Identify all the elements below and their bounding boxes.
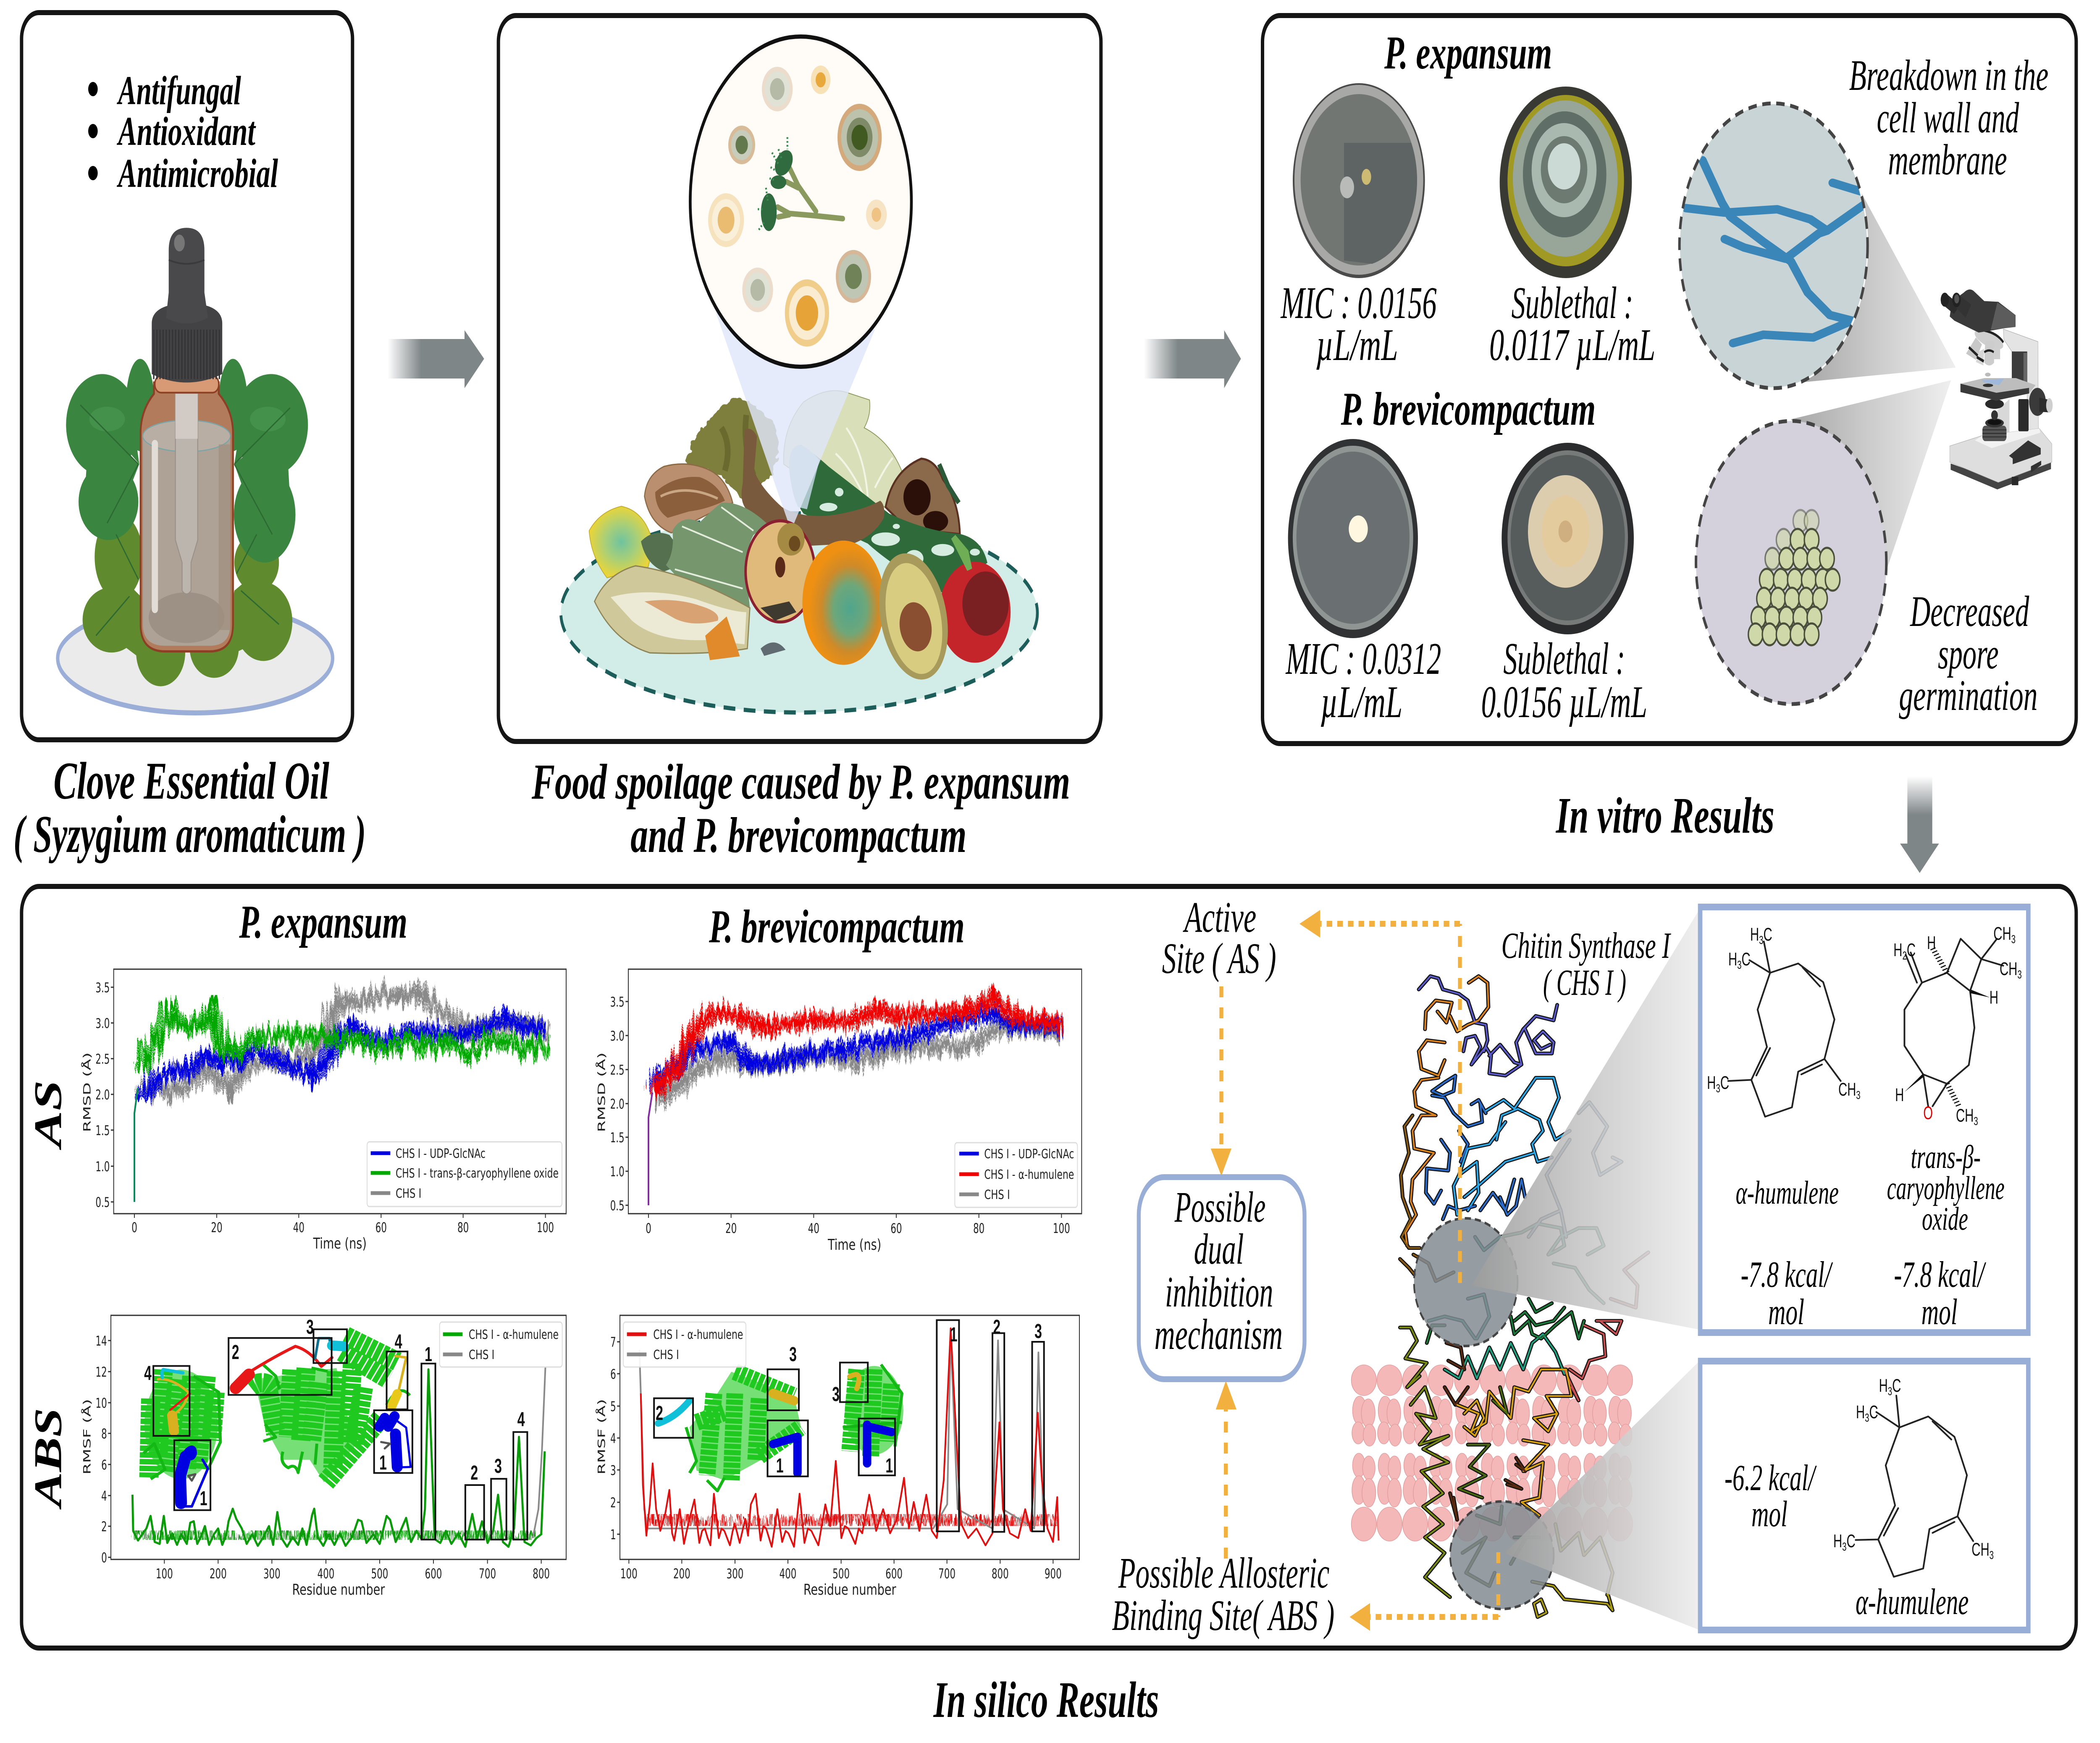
row label: AS: AS	[26, 1080, 70, 1151]
molecule: trans-beta-caryophyllene oxide	[1893, 923, 2022, 1128]
bullet list: properties	[88, 68, 278, 196]
box: allosteric site ligand	[1700, 1361, 2028, 1630]
plate: P. expansum MIC	[1293, 83, 1425, 278]
tick labels: 0	[131, 1220, 137, 1236]
label: P. expansum sublethal: 0.0117 µL/mL	[1489, 320, 1655, 370]
legend: CHS I - α-humulene	[469, 1328, 559, 1342]
chart: RMSD P. brevicompactum: 0.5	[610, 1199, 625, 1214]
molecule: trans-beta-caryophyllene oxide: C	[1907, 939, 1916, 960]
chart: RMSD P. expansum	[81, 969, 566, 1252]
chart: RMSF P. brevicompactum: Residue number	[803, 1581, 896, 1598]
box: active site ligands	[1700, 907, 2028, 1333]
plate: P. expansum sublethal	[1500, 87, 1632, 278]
tick labels: 100	[1053, 1221, 1070, 1236]
legend: CHS I	[469, 1348, 494, 1362]
tick labels: 400	[780, 1567, 796, 1582]
title: food spoilage: and P. brevicompactum	[630, 807, 966, 863]
marker: allosteric site circle	[1450, 1501, 1554, 1609]
molecule: alpha-humulene: C	[1720, 1072, 1729, 1093]
label: possible allosteric binding site: Binding Site( ABS )	[1112, 1591, 1334, 1640]
tick labels	[646, 1221, 1070, 1236]
chart: RMSD P. expansum: 2.5	[95, 1052, 110, 1067]
tick labels: 100	[537, 1220, 554, 1236]
chart: RMSF P. brevicompactum: 1	[610, 1527, 616, 1543]
tick labels	[620, 1567, 1062, 1582]
label: breakdown of cell wall	[1849, 51, 2048, 184]
icon: chitin synthase protein ribbon	[1400, 976, 1648, 1617]
molecule: alpha-humulene allosteric: H	[1879, 1375, 1888, 1396]
inset proteins: 2	[470, 1461, 478, 1484]
chart: RMSF P. expansum: 0	[101, 1551, 107, 1566]
icon: microscope	[1941, 289, 2053, 489]
score: caryophyllene oxide: mol	[1922, 1291, 1958, 1333]
label: P. expansum sublethal	[1489, 278, 1655, 370]
chart: RMSD P. brevicompactum	[596, 969, 1082, 1254]
molecule: trans-beta-caryophyllene oxide: H	[1927, 932, 1936, 953]
chart: RMSF P. expansum: 14	[96, 1334, 107, 1349]
molecule: alpha-humulene allosteric	[1833, 1375, 1994, 1577]
tick labels: 80	[973, 1221, 984, 1236]
inset proteins: 1	[379, 1451, 387, 1474]
legend	[440, 1322, 562, 1367]
box: possible dual inhibition mechanism: Possible	[1174, 1183, 1265, 1232]
inset proteins: 4	[144, 1362, 152, 1385]
score: alpha-humulene: mol	[1768, 1291, 1804, 1333]
molecule: alpha-humulene: H	[1728, 949, 1737, 969]
inset proteins: 4	[517, 1408, 525, 1431]
cone: active site zoom	[1471, 910, 1699, 1330]
legend: CHS I - trans-β-caryophyllene oxide	[396, 1166, 559, 1181]
molecule: trans-beta-caryophyllene oxide: H	[1990, 987, 1998, 1007]
molecule: alpha-humulene allosteric: C	[1892, 1375, 1901, 1396]
chart: RMSD P. brevicompactum: 2.0	[610, 1097, 625, 1112]
inset proteins: 1	[776, 1454, 784, 1477]
molecule: trans-beta-caryophyllene oxide: CH	[1993, 923, 2011, 944]
legend: CHS I - α-humulene	[653, 1328, 743, 1342]
chart: RMSD P. brevicompactum: 1.5	[610, 1130, 625, 1146]
inset proteins	[654, 1315, 1044, 1532]
tick labels: 40	[808, 1221, 819, 1236]
tick labels	[156, 1567, 550, 1582]
chart: RMSF P. brevicompactum	[596, 1315, 1079, 1598]
tick labels: 40	[293, 1220, 304, 1236]
plate: P. brevicompactum MIC	[1288, 439, 1418, 638]
icon: mould colonies	[708, 66, 887, 347]
legend: CHS I - α-humulene	[984, 1167, 1074, 1182]
chart: RMSF P. expansum: 12	[96, 1365, 107, 1380]
label: trans-beta-caryophyllene oxide	[1887, 1139, 2005, 1237]
box: possible dual inhibition mechanism	[1139, 1177, 1305, 1379]
score: alpha-humulene	[1741, 1254, 1833, 1333]
molecule: trans-beta-caryophyllene oxide: CH	[2000, 958, 2017, 979]
heading: P. brevicompactum: P. brevicompactum	[1341, 383, 1596, 435]
box: possible dual inhibition mechanism: dual	[1194, 1225, 1244, 1274]
label: decreased spore germination: spore	[1938, 630, 1999, 678]
label: P. brevicompactum sublethal: 0.0156 µL/mL	[1481, 677, 1647, 727]
tick labels: 700	[938, 1567, 956, 1582]
label: P. brevicompactum MIC: MIC : 0.0312	[1285, 634, 1441, 684]
chart: RMSD P. expansum: 3.0	[95, 1016, 110, 1031]
tick labels: 60	[375, 1220, 387, 1236]
tick labels: 100	[156, 1567, 173, 1582]
cones: microscope views	[1791, 186, 1956, 574]
inset proteins: 3	[306, 1315, 314, 1338]
legend: CHS I	[653, 1348, 679, 1362]
label: trans-beta-caryophyllene oxide: oxide	[1922, 1201, 1968, 1237]
tick labels: 800	[533, 1567, 550, 1582]
protein: middle view	[232, 1336, 411, 1482]
icon: foreground fruit	[746, 521, 1011, 689]
row label: ABS: ABS	[26, 1408, 70, 1510]
legend	[955, 1143, 1077, 1207]
label: chitin synthase I: Chitin Synthase I	[1502, 925, 1671, 966]
icon: lipid membrane	[1352, 1365, 1633, 1541]
inset proteins: 3	[789, 1343, 797, 1366]
molecule: alpha-humulene allosteric: H	[1856, 1401, 1865, 1422]
label: breakdown of cell wall: Breakdown in the	[1849, 51, 2048, 100]
icon: spoiled food plate	[561, 513, 1037, 712]
arrow: allosteric site to mechanism	[1216, 1381, 1236, 1559]
title: food spoilage: Food spoilage caused by P. expansum	[531, 754, 1070, 810]
legend: CHS I - UDP-GlcNAc	[984, 1147, 1074, 1162]
chart: RMSF P. expansum: 10	[96, 1396, 107, 1411]
molecule: alpha-humulene allosteric: 3	[1842, 1540, 1847, 1554]
chart: RMSF P. brevicompactum: 7	[610, 1335, 616, 1350]
chart: RMSD P. brevicompactum: RMSD (Å)	[596, 1052, 608, 1132]
icon: mould culture magnified circle	[690, 37, 911, 367]
title: clove essential oil: Clove Essential Oil	[53, 752, 329, 810]
label: P. expansum MIC: µL/mL	[1316, 320, 1398, 370]
chart: RMSD P. expansum: 2.0	[95, 1088, 110, 1103]
label: decreased spore germination: Decreased	[1910, 587, 2029, 636]
inset proteins: 2	[232, 1341, 239, 1364]
tick labels: 800	[992, 1567, 1009, 1582]
inset proteins: 1	[200, 1487, 207, 1510]
title: food spoilage	[531, 754, 1070, 863]
inset proteins: 3	[832, 1383, 840, 1406]
box: possible dual inhibition mechanism: mechanism	[1155, 1310, 1283, 1359]
chart: RMSF P. expansum: 6	[101, 1458, 107, 1473]
score: caryophyllene oxide: -7.8 kcal/	[1894, 1254, 1986, 1295]
heading: P. expansum: P. expansum	[239, 896, 407, 948]
tick labels: 60	[890, 1221, 902, 1236]
tick labels: 300	[263, 1567, 281, 1582]
chart: RMSD P. brevicompactum: 2.5	[610, 1063, 625, 1078]
tick labels: 700	[479, 1567, 496, 1582]
chart: RMSD P. brevicompactum: 1.0	[610, 1165, 625, 1180]
heading: P. expansum: P. expansum	[1384, 26, 1552, 79]
label: possible allosteric binding site	[1112, 1549, 1334, 1640]
chart: RMSF P. brevicompactum: 3	[610, 1463, 616, 1478]
chart: RMSF P. brevicompactum: 5	[610, 1399, 616, 1414]
molecule: alpha-humulene: H	[1707, 1072, 1716, 1093]
chart: RMSD P. brevicompactum: 3.0	[610, 1029, 625, 1044]
score: alpha-humulene allosteric: -6.2 kcal/	[1725, 1457, 1817, 1499]
molecule: trans-beta-caryophyllene oxide: 2	[1902, 949, 1907, 962]
legend	[367, 1142, 562, 1207]
chart: RMSF P. expansum: RMSF (Å)	[81, 1399, 93, 1475]
chart: RMSD P. expansum: 0.5	[95, 1195, 110, 1210]
chart: RMSF P. brevicompactum: 2	[610, 1496, 616, 1511]
tick labels: 300	[727, 1567, 743, 1582]
label: P. expansum sublethal: Sublethal :	[1512, 278, 1633, 328]
tick labels: 900	[1045, 1567, 1062, 1582]
molecule: alpha-humulene: 3	[1737, 958, 1742, 972]
chart: RMSF P. expansum	[81, 1315, 566, 1598]
molecule: alpha-humulene allosteric: H	[1833, 1530, 1842, 1551]
tick labels: 400	[318, 1567, 334, 1582]
molecule: alpha-humulene allosteric: 3	[1888, 1385, 1892, 1398]
box: possible dual inhibition mechanism: inhibition	[1165, 1268, 1273, 1317]
score: caryophyllene oxide	[1894, 1254, 1986, 1333]
label: chitin synthase I: ( CHS I )	[1543, 962, 1626, 1003]
tick labels: 600	[885, 1567, 903, 1582]
molecule: alpha-humulene allosteric: C	[1869, 1401, 1878, 1422]
label: breakdown of cell wall: cell wall and	[1877, 94, 2019, 142]
molecule: trans-beta-caryophyllene oxide: O	[1923, 1102, 1933, 1123]
chart: RMSF P. brevicompactum: RMSF (Å)	[596, 1399, 608, 1475]
title: clove essential oil	[13, 752, 366, 864]
legend	[623, 1322, 746, 1367]
chart: RMSD P. brevicompactum: 3.5	[610, 995, 625, 1010]
molecule: alpha-humulene allosteric: 3	[1990, 1548, 1994, 1562]
marker: active site circle	[1414, 1218, 1517, 1346]
data traces	[648, 1000, 1061, 1205]
label: active site: Active	[1183, 893, 1256, 942]
label: P. brevicompactum MIC	[1285, 634, 1441, 727]
tick labels: 100	[620, 1567, 638, 1582]
label: breakdown of cell wall: membrane	[1888, 136, 2007, 184]
legend: CHS I - UDP-GlcNAc	[396, 1146, 486, 1161]
molecule: trans-beta-caryophyllene oxide: 3	[2011, 933, 2016, 946]
molecule: alpha-humulene allosteric: CH	[1971, 1539, 1990, 1559]
chart: RMSD P. expansum: RMSD (Å)	[81, 1052, 93, 1132]
score: alpha-humulene: -7.8 kcal/	[1741, 1254, 1833, 1295]
molecule: alpha-humulene allosteric: 3	[1865, 1411, 1869, 1425]
legend: CHS I	[396, 1186, 421, 1201]
label: decreased spore germination	[1899, 587, 2037, 720]
inset proteins: 2	[993, 1315, 1000, 1338]
arrow: active site to mechanism	[1211, 986, 1231, 1176]
panel: in silico results	[21, 886, 2076, 1648]
bullet list: properties: Antimicrobial	[116, 151, 278, 196]
arrow: in vitro to in silico	[1900, 776, 1939, 873]
score: alpha-humulene allosteric	[1725, 1457, 1817, 1535]
plate: P. brevicompactum sublethal	[1502, 443, 1634, 634]
molecule: alpha-humulene: C	[1742, 949, 1751, 969]
data traces	[639, 1328, 1059, 1547]
tick labels: 500	[832, 1567, 850, 1582]
inset proteins	[144, 1315, 527, 1540]
molecule: trans-beta-caryophyllene oxide: 3	[1974, 1115, 1978, 1128]
icon: dropper bottle	[141, 228, 233, 652]
tick labels: 20	[211, 1220, 223, 1236]
label: P. brevicompactum sublethal: Sublethal :	[1503, 634, 1625, 684]
arrow: protein to active site	[1299, 910, 1460, 1283]
label: chitin synthase I	[1502, 925, 1671, 1003]
label: alpha-humulene: α-humulene	[1856, 1581, 1969, 1622]
molecule: alpha-humulene: C	[1764, 924, 1772, 944]
micrograph: hyphae damage	[1680, 103, 1868, 388]
inset proteins: 2	[656, 1401, 663, 1425]
legend: CHS I	[984, 1188, 1010, 1202]
molecule: alpha-humulene	[1707, 924, 1861, 1117]
inset proteins: 4	[395, 1330, 402, 1353]
title: in silico results: In silico Results	[933, 1672, 1159, 1728]
chart: RMSF P. expansum: Residue number	[292, 1581, 385, 1598]
cone: allosteric site zoom	[1504, 1361, 1699, 1630]
inset proteins: 1	[885, 1454, 893, 1477]
cone: magnification	[714, 308, 875, 531]
label: trans-beta-caryophyllene oxide: trans-β-	[1911, 1139, 1981, 1175]
chart: RMSD P. brevicompactum: Time (ns)	[827, 1236, 881, 1254]
inset proteins: 1	[425, 1343, 432, 1366]
icon: plate under bottle	[58, 604, 333, 713]
chart: RMSD P. expansum: 3.5	[95, 981, 110, 996]
tick labels: 0	[646, 1221, 651, 1236]
arrow: protein to allosteric site	[1349, 1552, 1498, 1631]
label: decreased spore germination: germination	[1899, 671, 2037, 720]
chart: RMSD P. expansum: Time (ns)	[313, 1235, 367, 1252]
data traces	[132, 1367, 546, 1547]
chart: RMSF P. expansum: 2	[101, 1520, 107, 1535]
molecule: alpha-humulene allosteric: C	[1847, 1530, 1856, 1551]
label: possible allosteric binding site: Possible Allosteric	[1118, 1549, 1329, 1598]
chart: RMSD P. expansum: 1.0	[95, 1159, 110, 1175]
label: P. expansum MIC: MIC : 0.0156	[1280, 278, 1437, 328]
icon: Penicillium conidiophore	[758, 137, 843, 231]
molecule: alpha-humulene: 3	[1759, 933, 1764, 947]
molecule: trans-beta-caryophyllene oxide: CH	[1956, 1105, 1974, 1125]
micrograph: spores	[1696, 421, 1886, 704]
tick labels	[131, 1220, 554, 1236]
tick labels: 200	[673, 1567, 690, 1582]
heading: P. brevicompactum: P. brevicompactum	[709, 900, 965, 953]
chart: RMSF P. expansum: 8	[101, 1427, 107, 1442]
title: in vitro results: In vitro Results	[1555, 788, 1774, 844]
label: trans-beta-caryophyllene oxide: caryophyllene	[1887, 1170, 2005, 1207]
tick labels: 600	[425, 1567, 442, 1582]
label: P. brevicompactum sublethal	[1481, 634, 1647, 727]
molecule: trans-beta-caryophyllene oxide: H	[1895, 1084, 1904, 1105]
inset proteins: 3	[1034, 1320, 1042, 1343]
molecule: alpha-humulene: 3	[1716, 1082, 1720, 1095]
label: P. expansum MIC	[1280, 278, 1437, 370]
bullet list: properties: Antifungal	[116, 68, 242, 113]
chart: RMSD P. expansum: 1.5	[95, 1123, 110, 1138]
spore cluster	[1748, 510, 1840, 645]
icon: pile of spoiled food	[589, 391, 987, 660]
label: P. brevicompactum MIC: µL/mL	[1320, 677, 1402, 727]
panel: clove essential oil	[21, 13, 352, 740]
chart: RMSF P. brevicompactum: 6	[610, 1367, 616, 1382]
tick labels: 20	[725, 1221, 737, 1236]
chart: RMSF P. expansum: 4	[101, 1489, 107, 1504]
score: alpha-humulene allosteric: mol	[1751, 1493, 1788, 1535]
tick labels: 80	[457, 1220, 469, 1236]
icon: clove leaves	[66, 359, 308, 686]
molecule: trans-beta-caryophyllene oxide: 3	[2017, 968, 2022, 981]
label: alpha-humulene: α-humulene	[1736, 1175, 1839, 1211]
panel: food spoilage	[499, 16, 1101, 741]
chart: RMSF P. brevicompactum: 4	[610, 1431, 616, 1446]
bullet list: properties: Antioxidant	[116, 109, 256, 154]
panel: in vitro results	[1263, 16, 2076, 744]
arrow: clove oil to food spoilage	[388, 330, 484, 388]
label: active site	[1162, 893, 1276, 983]
data traces	[134, 991, 546, 1202]
molecule: alpha-humulene: 3	[1856, 1088, 1861, 1102]
tick labels: 200	[210, 1567, 227, 1582]
inset proteins: 1	[950, 1323, 958, 1346]
molecule: alpha-humulene: H	[1750, 924, 1759, 944]
label: active site: Site ( AS )	[1162, 934, 1276, 983]
title: clove essential oil: ( Syzygium aromaticum )	[13, 805, 366, 864]
protein: left view	[144, 1370, 220, 1506]
tick labels: 500	[371, 1567, 388, 1582]
molecule: alpha-humulene: CH	[1838, 1079, 1856, 1099]
arrow: food spoilage to in vitro	[1144, 330, 1241, 388]
molecule: trans-beta-caryophyllene oxide: H	[1893, 939, 1902, 960]
inset proteins: 3	[494, 1454, 502, 1477]
